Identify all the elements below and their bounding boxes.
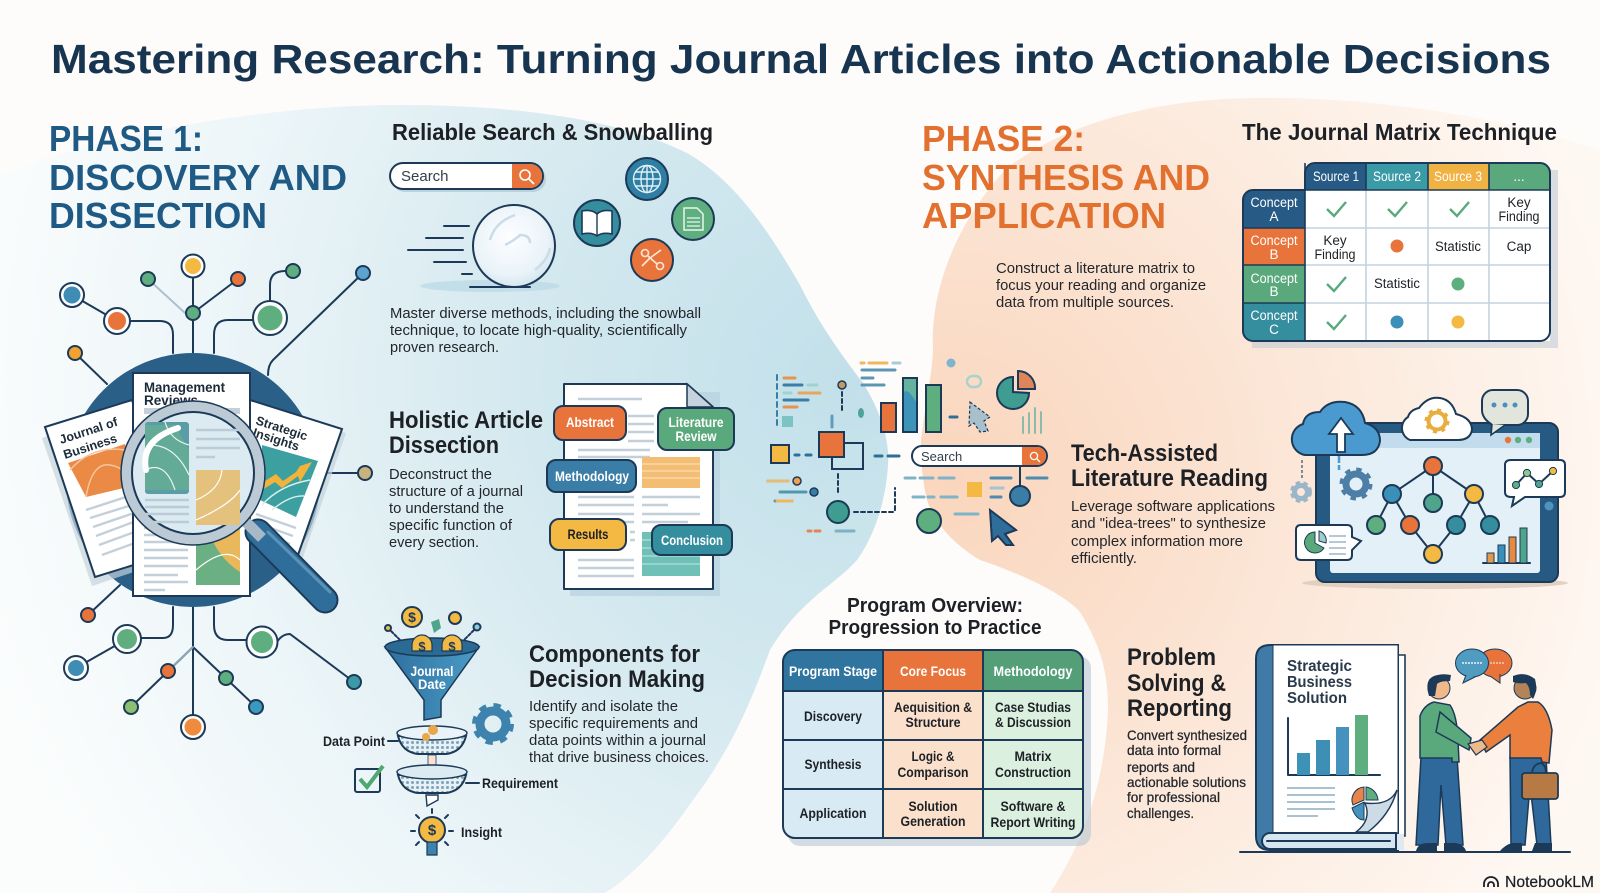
icon: data funnel: $	[448, 639, 456, 654]
journal: Management Reviews: Management	[144, 380, 225, 395]
heading: phase 1: PHASE 1:	[49, 118, 203, 159]
text block: Deconstruct the	[389, 466, 492, 483]
icon: document	[672, 198, 714, 240]
tag: Literature Review: Literature	[668, 415, 724, 430]
text block: Leverage software applications	[1071, 498, 1275, 515]
matrix table: Finding	[1498, 209, 1540, 224]
text block: complex information more	[1071, 533, 1243, 550]
program table: Case Studias	[995, 699, 1071, 715]
search bar: Search	[401, 168, 449, 185]
heading: phase 2: SYNTHESIS AND	[922, 157, 1210, 198]
tag: Results: Results	[568, 526, 609, 542]
program table: Application	[800, 805, 866, 821]
section: components for decision making	[323, 607, 709, 855]
icon: small gear	[1292, 460, 1310, 500]
matrix table	[1243, 163, 1558, 348]
magnifying glass	[121, 401, 330, 600]
tag: Methodology	[547, 460, 636, 492]
dark circle backdrop	[66, 353, 320, 607]
text block: Convert synthesized	[1127, 727, 1247, 743]
tag: Literature Review: Review	[676, 429, 717, 444]
text block: Construct a literature matrix to	[996, 260, 1195, 277]
illustration: handshake	[1416, 649, 1558, 851]
matrix table: A	[1269, 209, 1279, 224]
program table: Construction	[995, 764, 1071, 780]
illustration: report book: Solution	[1287, 690, 1347, 707]
text block: and "idea-trees" to synthesize	[1071, 515, 1266, 532]
heading: phase 1	[49, 118, 347, 236]
icon: data funnel: Date	[418, 677, 446, 692]
heading: phase 1: DISCOVERY AND	[49, 157, 347, 198]
text block: data into formal	[1127, 742, 1221, 758]
icon: upload cloud	[1292, 402, 1380, 470]
text block	[390, 305, 701, 356]
tag: Abstract: Abstract	[566, 415, 614, 430]
journal: Management Reviews: Reviews	[144, 393, 198, 408]
journal: Strategic Insights	[250, 400, 346, 560]
illustration: report book: Strategic	[1287, 658, 1352, 675]
person: left	[1416, 674, 1471, 851]
text block: for professional	[1127, 789, 1220, 805]
section heading	[389, 407, 543, 459]
journal: Management Reviews	[133, 373, 250, 596]
text block: technique, to locate high-quality, scientifically	[390, 322, 687, 339]
central data transition graphic: Search	[921, 449, 962, 464]
text block	[529, 698, 709, 766]
matrix table: Key	[1323, 233, 1347, 248]
icon: book	[574, 200, 620, 246]
section: program overview	[783, 595, 1091, 846]
tag: Conclusion	[652, 525, 732, 555]
matrix table: B	[1269, 247, 1279, 262]
icon: globe	[626, 158, 668, 200]
section heading: Holistic Article	[389, 407, 543, 434]
matrix table: C	[1269, 322, 1279, 337]
heading: phase 2	[922, 118, 1210, 236]
journal: Journal of Business: Business	[62, 431, 119, 462]
matrix table: Key	[1507, 195, 1531, 210]
matrix table: Concept	[1250, 195, 1298, 210]
section heading: Reliable Search & Snowballing	[392, 119, 713, 145]
heading: phase 1: DISSECTION	[49, 195, 267, 236]
section heading: Solving &	[1127, 670, 1226, 697]
icon: data funnel: $	[408, 609, 416, 625]
text block: challenges.	[1127, 805, 1194, 821]
heading: phase 2: PHASE 2:	[922, 118, 1085, 159]
section heading: Decision Making	[529, 666, 705, 693]
pie bubble	[1296, 525, 1361, 560]
journal: Journal of Business: Journal of	[58, 415, 120, 447]
background blob: phase 2	[921, 98, 1600, 893]
text block: data points within a journal	[529, 732, 706, 749]
label: data point: Data Point	[323, 733, 385, 749]
section: reliable search and snowballing	[390, 119, 714, 356]
program table: Structure	[906, 714, 961, 730]
central data transition graphic	[768, 358, 1047, 545]
section: tech-assisted literature reading	[1071, 390, 1568, 589]
matrix table: Source 3	[1434, 169, 1482, 184]
section heading: Reporting	[1127, 695, 1232, 722]
text block: focus your reading and organize	[996, 277, 1206, 294]
journal: Strategic Insights: Insights	[251, 426, 301, 454]
program table: Discovery	[804, 708, 862, 724]
section heading: Progression to Practice	[828, 617, 1042, 639]
data fragments	[768, 363, 1047, 531]
section heading	[1071, 440, 1268, 492]
program table: Aequisition &	[894, 699, 972, 715]
section: problem solving and reporting	[1127, 644, 1570, 852]
program table: Comparison	[898, 764, 968, 780]
icon: data funnel: Journal	[410, 664, 454, 679]
matrix table: Statistic	[1374, 276, 1420, 291]
program table: Synthesis	[804, 756, 862, 772]
bar chart	[1483, 528, 1530, 563]
section heading: Tech-Assisted	[1071, 440, 1218, 467]
program table: Solution	[908, 798, 958, 814]
text block: Identify and isolate the	[529, 698, 678, 715]
search bar	[390, 163, 546, 192]
text block: to understand the	[389, 500, 504, 517]
heading: phase 2: APPLICATION	[922, 195, 1166, 236]
icon: insight bulb: $	[428, 822, 437, 839]
program table: Generation	[900, 813, 966, 829]
text block	[996, 260, 1206, 311]
text block: every section.	[389, 534, 479, 551]
text block: Master diverse methods, including the snowball	[390, 305, 701, 322]
section heading: Literature Reading	[1071, 465, 1268, 492]
section heading: The Journal Matrix Technique	[1242, 119, 1557, 145]
tag: Results	[550, 519, 626, 550]
text block: structure of a journal	[389, 483, 523, 500]
network nodes	[60, 254, 372, 739]
matrix table: Source 1	[1313, 169, 1359, 184]
program table: & Discussion	[995, 714, 1071, 730]
section heading: Program Overview:	[847, 595, 1023, 617]
illustration: journal network	[42, 254, 372, 739]
icon: gear	[1342, 470, 1370, 498]
section heading: Dissection	[389, 432, 499, 459]
idea tree	[1367, 457, 1499, 563]
text block: actionable solutions	[1127, 774, 1246, 790]
text block	[389, 466, 523, 551]
icon: insight bulb	[411, 809, 453, 855]
section heading	[529, 641, 705, 693]
text block: that drive business choices.	[529, 749, 709, 766]
program table: Logic &	[912, 748, 954, 764]
speech bubble	[1482, 390, 1528, 435]
speech bubbles	[1456, 649, 1512, 683]
program table: Program Stage	[789, 664, 877, 679]
icon: checkbox	[355, 766, 383, 792]
text block: specific function of	[389, 517, 513, 534]
icon: network	[631, 239, 673, 281]
matrix table: Finding	[1314, 247, 1356, 262]
section heading	[828, 595, 1042, 639]
illustration: tablet with idea tree	[1292, 390, 1568, 589]
text block: data from multiple sources.	[996, 294, 1174, 311]
matrix table: Cap	[1507, 239, 1531, 254]
chart bubble	[1505, 460, 1565, 506]
illustration: report book	[1240, 645, 1570, 852]
matrix table: ...	[1513, 169, 1525, 184]
text block: efficiently.	[1071, 550, 1137, 567]
background blob: phase 1	[0, 105, 888, 893]
matrix table: Concept	[1250, 233, 1298, 248]
article illustration	[547, 384, 734, 596]
section heading: Problem	[1127, 644, 1216, 671]
label: requirement: Requirement	[482, 775, 558, 791]
journal: Strategic Insights: Strategic	[254, 414, 309, 443]
journal: Journal of Business	[42, 400, 184, 586]
section heading: Components for	[529, 641, 700, 668]
program table: Report Writing	[990, 814, 1076, 830]
program table: Matrix	[1014, 748, 1052, 764]
text block: reports and	[1127, 759, 1195, 775]
icon: settings cloud	[1402, 398, 1472, 440]
text block: proven research.	[390, 339, 499, 356]
tag: Conclusion: Conclusion	[661, 533, 723, 548]
icon: gear	[476, 707, 510, 741]
text block: specific requirements and	[529, 715, 698, 732]
icon: data funnel: $	[418, 639, 426, 654]
icon: data funnel	[385, 607, 480, 720]
title: Mastering Research: Turning Journal Articles into Actionable Decisions	[51, 36, 1551, 82]
text block	[1127, 727, 1247, 821]
section heading	[1127, 644, 1232, 722]
icon: snowball	[408, 205, 560, 292]
tag: Abstract	[554, 406, 626, 440]
network connectors	[72, 271, 363, 727]
notebooklm logo: NotebookLM	[1505, 874, 1594, 891]
matrix table: Concept	[1250, 271, 1298, 286]
tag: Literature Review	[658, 408, 734, 450]
icon: sieves	[397, 725, 467, 806]
text block	[1071, 498, 1275, 567]
program table	[783, 650, 1091, 846]
matrix table: B	[1269, 284, 1279, 299]
program table: Methodology	[994, 664, 1073, 679]
illustration: report book: Business	[1287, 674, 1352, 691]
matrix table: Source 2	[1373, 169, 1421, 184]
section: holistic article dissection	[389, 384, 734, 596]
matrix table: Concept	[1250, 308, 1298, 323]
label: insight: Insight	[461, 824, 502, 840]
program table: Core Focus	[900, 664, 966, 679]
person: right	[1468, 674, 1558, 851]
tag: Methodology: Methodology	[555, 469, 629, 484]
section: journal matrix technique	[996, 119, 1558, 348]
matrix table: Statistic	[1435, 239, 1481, 254]
program table: Software &	[1000, 798, 1066, 814]
